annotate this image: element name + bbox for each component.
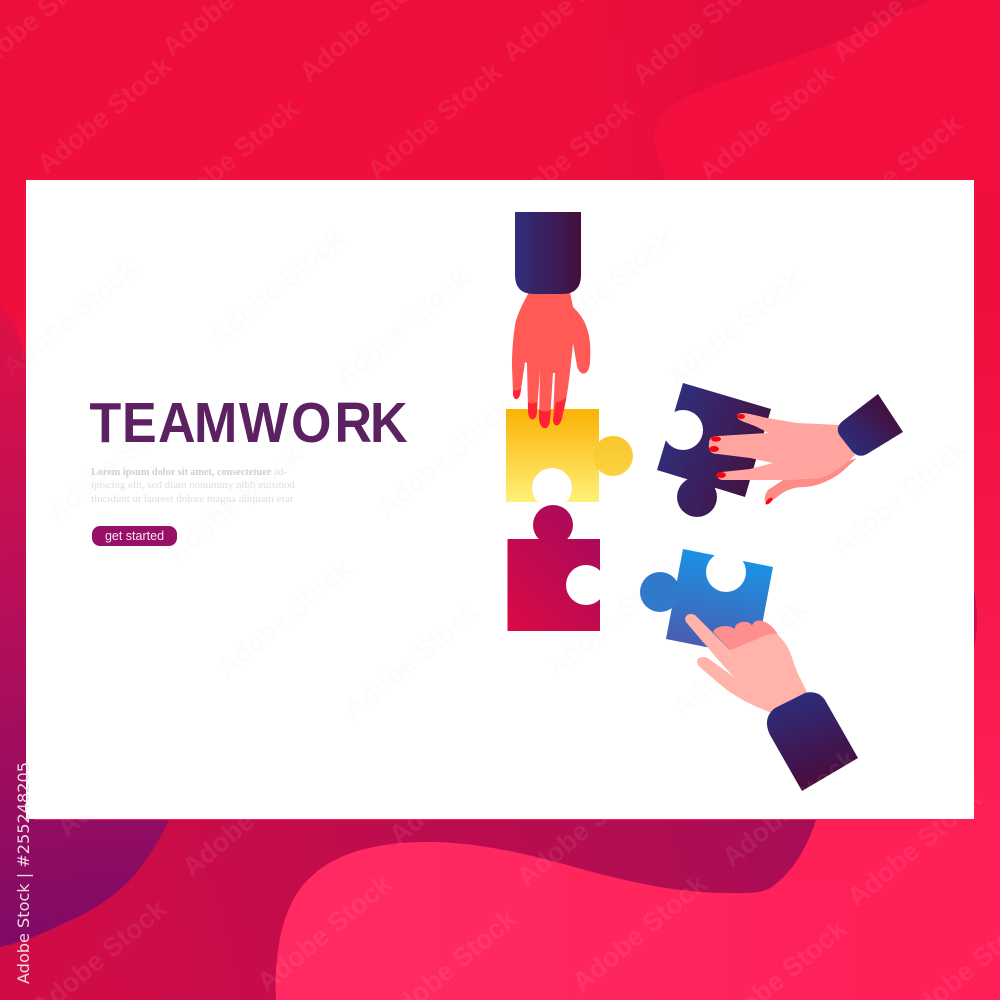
watermark on panel: Adobe Stock (338, 596, 485, 726)
watermark: Adobe Stock (493, 93, 640, 223)
text block: lorem ipsum: Lorem ipsum dolor sit amet, consectetuer ad- (91, 467, 287, 478)
watermark on panel (0, 223, 973, 726)
watermark id: vertical stock number: Adobe Stock | #255248205 (14, 762, 33, 984)
fingernails: top hand (513, 388, 566, 428)
puzzle piece: blue (640, 549, 773, 657)
watermark: Adobe Stock (176, 753, 323, 883)
watermark on panel: Adobe Stock (203, 223, 350, 353)
text block: lorem ipsum (91, 467, 296, 505)
watermark on panel: Adobe Stock (533, 223, 680, 353)
watermark: Adobe Stock (821, 108, 968, 238)
watermark on panel: Adobe Stock (41, 398, 188, 528)
hand: top, reaching down with sleeve (512, 212, 590, 428)
watermark on panel: Adobe Stock (661, 263, 808, 393)
watermark: Adobe Stock (566, 868, 713, 998)
sleeve: right hand (838, 394, 903, 456)
watermark on panel: Adobe Stock (161, 438, 308, 568)
hand: bottom, pointing on blue piece (685, 614, 858, 791)
watermark: Adobe Stock (383, 721, 530, 851)
fingernails: right hand (709, 414, 774, 506)
watermark: Adobe Stock (158, 93, 305, 223)
watermark on panel: Adobe Stock (826, 433, 973, 563)
sleeve: top hand (515, 212, 581, 294)
panel: white card (26, 180, 974, 819)
watermark: Adobe Stock (716, 743, 863, 873)
watermark: Adobe Stock (361, 56, 508, 186)
watermark on panel: Adobe Stock (666, 593, 813, 723)
puzzle piece: dark navy (657, 383, 771, 517)
watermark on panel: Adobe Stock (211, 553, 358, 683)
watermark: Adobe Stock (251, 868, 398, 998)
watermark on panel: Adobe Stock (0, 253, 143, 383)
sleeve: bottom hand (767, 692, 858, 791)
text block: lorem ipsum: ipiscing elit, sed diam nonummy nibh euismod (91, 480, 296, 491)
puzzle piece: yellow (506, 409, 633, 508)
watermark: Adobe Stock (841, 783, 988, 913)
watermark on panel: Adobe Stock (371, 393, 518, 523)
watermark: Adobe Stock (511, 763, 658, 893)
watermark: Adobe Stock (693, 58, 840, 188)
hand: right, woman's hand on dark piece (709, 394, 903, 506)
watermark on panel: Adobe Stock (329, 263, 476, 393)
puzzle piece: crimson (508, 505, 606, 631)
title: TEAMWORK (90, 391, 408, 455)
text block: lorem ipsum: tincidunt ut laoreet dolore magna aliquam erat (91, 494, 293, 505)
watermark: Adobe Stock (31, 50, 178, 180)
watermark on panel: Adobe Stock (541, 553, 688, 683)
button: get started (92, 526, 177, 546)
button: get started: get started (105, 529, 164, 543)
watermark: Adobe Stock (51, 713, 198, 843)
